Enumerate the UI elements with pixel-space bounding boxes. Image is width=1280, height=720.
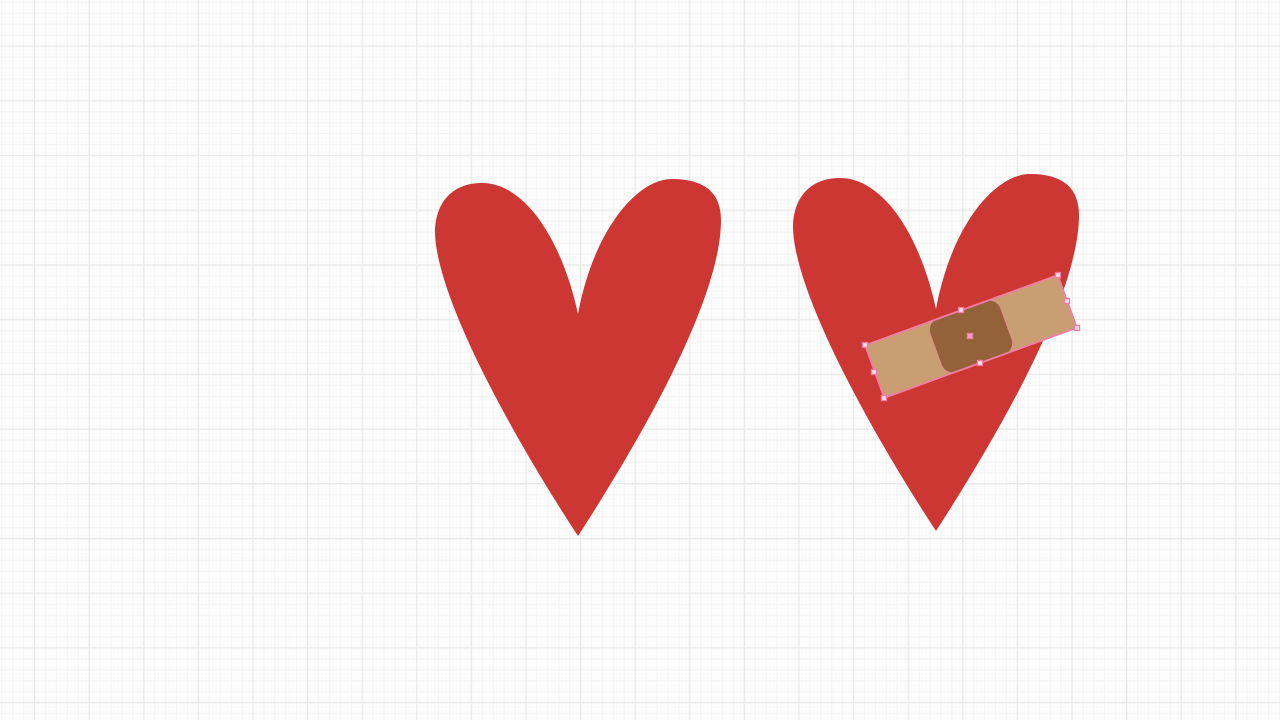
icon: bandage with selection handles	[862, 272, 1080, 400]
bandage strip	[865, 275, 1077, 398]
selection handles	[862, 272, 1080, 400]
bandage selection outline	[865, 275, 1077, 398]
icon: right red heart with bandage	[793, 174, 1080, 531]
icon: left red heart	[435, 179, 721, 536]
icon: right red heart	[793, 174, 1079, 531]
bandage center pad	[926, 297, 1016, 376]
